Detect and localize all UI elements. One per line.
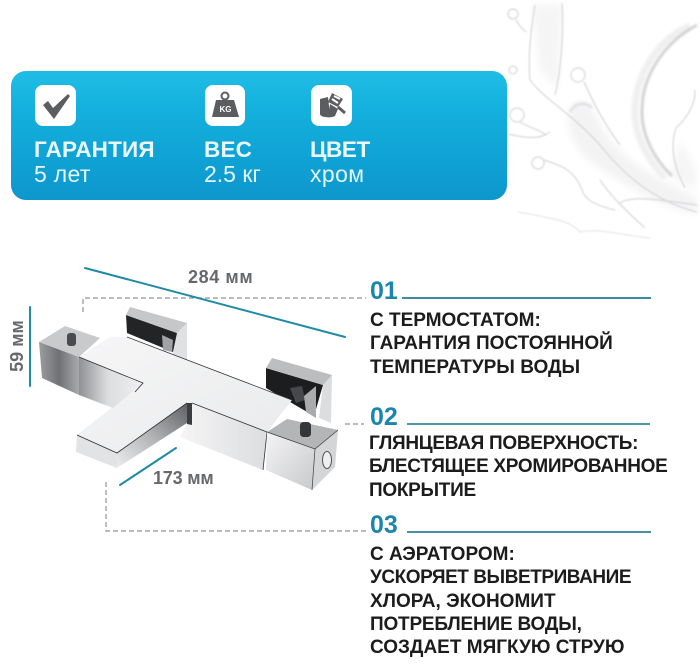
dimension: length: 284 мм	[188, 267, 253, 287]
text 03	[370, 544, 631, 658]
text 03: ПОТРЕБЛЕНИЕ ВОДЫ,	[370, 614, 582, 635]
wall bracket rear right	[266, 358, 332, 423]
rule 03	[407, 531, 651, 533]
feature 02	[369, 403, 668, 501]
blue spec panel	[11, 71, 507, 200]
dimension: depth: 173 мм	[153, 468, 213, 488]
number 02: 02	[370, 403, 398, 431]
spec: colour: ЦВЕТ	[310, 137, 370, 162]
text 02: БЛЕСТЯЩЕЕ ХРОМИРОВАННОЕ	[369, 456, 667, 477]
icon: weight	[205, 85, 245, 126]
rule 01	[402, 297, 651, 299]
rule 02	[407, 423, 650, 425]
text 03: ХЛОРА, ЭКОНОМИТ	[370, 591, 556, 612]
text 03: УСКОРЯЕТ ВЫВЕТРИВАНИЕ	[370, 567, 631, 588]
text 01: С ТЕРМОСТАТОМ:	[370, 310, 541, 331]
spec: warranty: ГАРАНТИЯ	[34, 137, 155, 162]
faucet body	[76, 337, 292, 470]
thermostat handle right	[266, 419, 338, 490]
icon: weight: KG	[220, 105, 232, 114]
dimension: height: 59 мм	[7, 320, 27, 372]
number 03: 03	[370, 511, 398, 539]
text 02: ПОКРЫТИЕ	[369, 480, 476, 501]
text 01: ТЕМПЕРАТУРЫ ВОДЫ	[370, 357, 580, 378]
feature 01	[370, 277, 651, 378]
icon: warranty check	[35, 85, 76, 126]
colour value: хром	[310, 161, 364, 187]
text 03: СОЗДАЕТ МЯГКУЮ СТРУЮ	[370, 637, 624, 658]
warranty value: 5 лет	[34, 161, 91, 187]
text 01	[370, 310, 613, 378]
text 03: С АЭРАТОРОМ:	[370, 544, 515, 565]
text 01: ГАРАНТИЯ ПОСТОЯННОЙ	[370, 333, 613, 354]
weight value: 2.5 кг	[204, 161, 261, 187]
spec: weight: ВЕС	[204, 137, 252, 162]
milk splash decoration	[507, 2, 698, 238]
icon: paint colour	[311, 85, 352, 126]
thermostat handle left	[39, 326, 100, 395]
wall bracket rear left	[126, 307, 187, 360]
text 02	[369, 433, 668, 501]
feature 03	[370, 511, 651, 658]
text 02: ГЛЯНЦЕВАЯ ПОВЕРХНОСТЬ:	[369, 433, 638, 454]
number 01: 01	[370, 277, 398, 305]
